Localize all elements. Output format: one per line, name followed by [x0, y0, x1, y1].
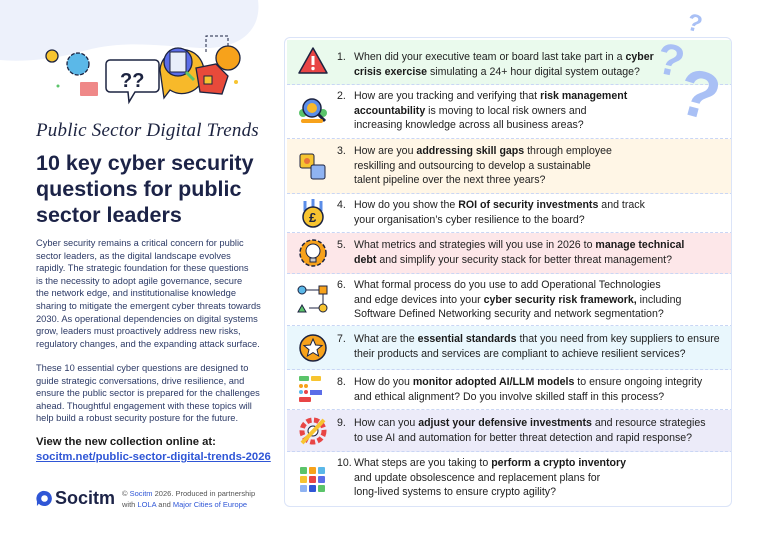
icon: question marks: ?: [684, 9, 705, 38]
hero illustration: ??: [120, 70, 144, 92]
intro paragraph: [36, 238, 261, 349]
question 5: 5.: [337, 239, 346, 251]
question 9: to use AI and automation for better threat detection and rapid response?: [354, 432, 692, 444]
question 3: 3.: [337, 145, 346, 157]
question 4: How do you show the ROI of security investments and track: [354, 199, 645, 211]
icon: magnifier people: [299, 98, 327, 123]
question 8: [337, 376, 702, 403]
question 3: [337, 145, 612, 186]
question 9: [337, 417, 706, 444]
logo: Socitm: Socitm: [55, 488, 115, 508]
icon: flow: [297, 286, 328, 312]
footer credits: © Socitm 2026. Produced in partnership: [122, 489, 255, 498]
question 8: and ethical alignment? Do you involve skilled staff in this process?: [354, 391, 664, 403]
question 4: [337, 199, 645, 226]
second paragraph: [36, 363, 260, 423]
icon: pound coin: [302, 199, 324, 228]
question 5: What metrics and strategies will you use in 2026 to manage technical: [354, 239, 684, 251]
question 7: [337, 333, 720, 360]
question 7: 7.: [337, 333, 346, 345]
icon: question marks: ?: [670, 53, 728, 135]
question 5: [337, 239, 684, 266]
icon: question marks: [652, 9, 728, 135]
icon: gear wrench: [300, 418, 326, 444]
question 2: increasing knowledge across all business areas?: [354, 119, 584, 131]
question 7: What are the essential standards that you need from key suppliers to ensure: [354, 333, 720, 345]
second paragraph: ensure the public sector is prepared for the challenges: [36, 388, 260, 398]
question 1: When did your executive team or board last take part in a cyber: [354, 51, 654, 63]
question 4: 4.: [337, 199, 346, 211]
intro paragraph: rapidly. The strategic foundation for these questions: [36, 263, 249, 273]
title: questions for public: [36, 177, 241, 201]
question 2: [337, 90, 628, 131]
question 6: and edge devices into your cyber security risk framework, including: [354, 294, 681, 306]
question 2: accountability is moving to local risk owners and: [354, 105, 587, 117]
intro paragraph: regulatory changes, and the expanding attack surface.: [36, 339, 260, 349]
footer credits: [122, 489, 255, 509]
question 5: debt and simplify your security stack for better threat management?: [354, 254, 672, 266]
panel: questions: [284, 37, 732, 507]
icon: grid: [300, 467, 325, 492]
question 3: talent pipeline over the next three years?: [354, 174, 545, 186]
second paragraph: guide strategic conversations, drive resilience, and: [36, 376, 244, 386]
intro paragraph: sharing to mitigate the emergent cyber threats towards: [36, 301, 261, 311]
intro paragraph: the network edge, and institutionalise knowledge: [36, 288, 236, 298]
question 6: What formal process do you use to add Operational Technologies: [354, 279, 661, 291]
call to action: socitm.net/public-sector-digital-trends-2026: [36, 451, 271, 463]
question 4: your organisation’s cyber resilience to the board?: [354, 214, 585, 226]
question 10: [337, 457, 626, 498]
question 10: What steps are you taking to perform a crypto inventory: [354, 457, 626, 469]
question 6: [337, 279, 681, 320]
title: sector leaders: [36, 203, 182, 227]
question 2: 2.: [337, 90, 346, 102]
call to action: View the new collection online at:: [36, 436, 216, 448]
intro paragraph: grow, leaders must proactively address new risks,: [36, 326, 241, 336]
subtitle script: Public Sector Digital Trends: [36, 120, 259, 141]
call to action: [36, 436, 271, 463]
icon: bulb gear: [299, 239, 327, 267]
question 1: 1.: [337, 51, 346, 63]
question 2: How are you tracking and verifying that risk management: [354, 90, 627, 102]
icon: pound coin: £: [309, 210, 317, 225]
question 1: [337, 51, 654, 78]
question 8: How do you monitor adopted AI/LLM models to ensure ongoing integrity: [354, 376, 702, 388]
question 1: crisis exercise simulating a 24+ hour digital system outage?: [354, 66, 640, 78]
hero illustration: [45, 36, 241, 104]
question 3: reskilling and outsourcing to develop a sustainable: [354, 160, 591, 172]
question 9: How can you adjust your defensive investments and resource strategies: [354, 417, 706, 429]
icon: star badge: [299, 334, 327, 362]
icon: puzzle: [300, 154, 326, 180]
icon: blocks: [299, 376, 322, 402]
second paragraph: help build a robust security posture for the future.: [36, 413, 238, 423]
second paragraph: These 10 essential cyber questions are designed to: [36, 363, 248, 373]
second paragraph: ahead. Thoughtful engagement with these topics will: [36, 401, 252, 411]
title: 10 key cyber security: [36, 151, 254, 175]
question 6: Software Defined Networking security and network segmentation?: [354, 308, 664, 320]
intro paragraph: is the necessity to adopt agile governance, secure: [36, 276, 242, 286]
question 7: their products and services are compliant to achieve resilient services?: [354, 348, 686, 360]
intro paragraph: Cyber security remains a critical concern for public: [36, 238, 244, 248]
intro paragraph: 2030. As operational dependencies on digital systems: [36, 314, 258, 324]
question 9: 9.: [337, 417, 346, 429]
icon: warning: [298, 47, 328, 74]
intro paragraph: sector leaders, as the digital landscape evolves: [36, 251, 231, 261]
question 8: 8.: [337, 376, 346, 388]
background blob: [0, 0, 258, 61]
question 10: and update obsolescence and replacement plans for: [354, 472, 600, 484]
question 10: 10.: [337, 457, 352, 469]
title: [36, 151, 254, 227]
icon: question marks: ?: [652, 34, 689, 87]
question 10: long-lived systems to ensure crypto agility?: [354, 486, 556, 498]
question 3: How are you addressing skill gaps through employee: [354, 145, 612, 157]
question 6: 6.: [337, 279, 346, 291]
footer credits: with LOLA and Major Cities of Europe: [122, 500, 247, 509]
